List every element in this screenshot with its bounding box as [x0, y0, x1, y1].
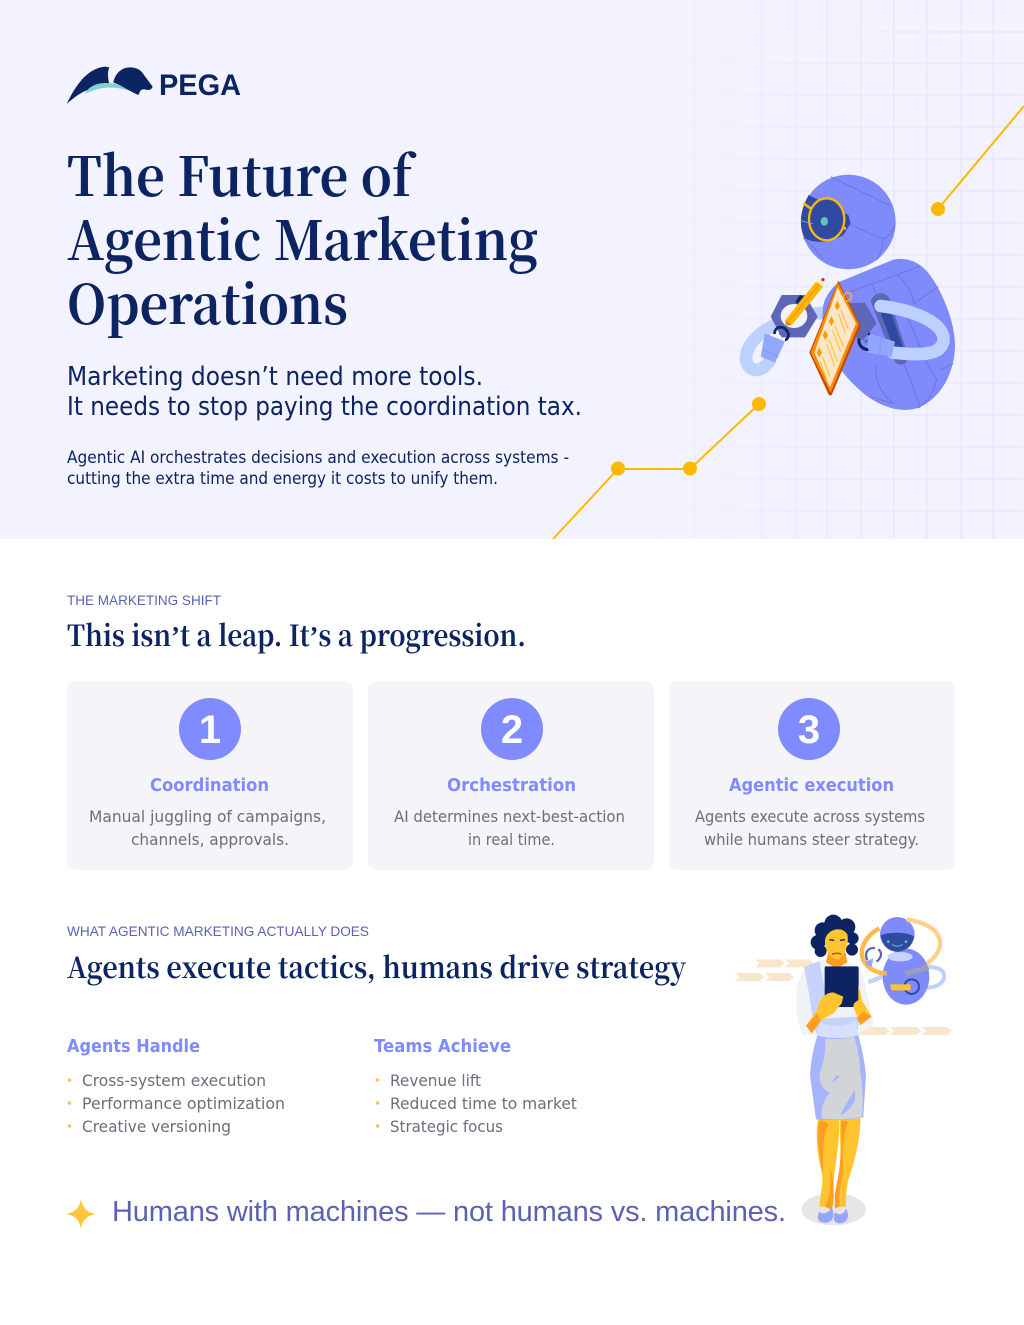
panel: step 1: Coordination [150, 775, 269, 796]
small robot body [883, 949, 929, 1005]
pencil [785, 278, 825, 326]
list: agents handle: Creative versioning [82, 1117, 231, 1136]
robot left gripper [761, 333, 785, 363]
panel: step 2 [368, 681, 654, 870]
list: agents handle: Performance optimization [82, 1094, 285, 1113]
clipboard [809, 281, 861, 395]
heading: what agentic marketing does: WHAT AGENTIC MARKETING ACTUALLY DOES [67, 923, 369, 939]
robot head [801, 175, 896, 269]
logo: Pega [67, 67, 241, 104]
panel: step 2: in real time. [468, 830, 555, 849]
subtitle: It needs to stop paying the coordination tax. [67, 392, 582, 422]
arms and hands [853, 985, 872, 1025]
list: teams achieve: Teams Achieve [374, 1036, 511, 1057]
list: agents handle [67, 1036, 285, 1136]
subtitle [67, 362, 582, 422]
panel: step 2: AI determines next-best-action [394, 807, 625, 826]
icon: sparkle [66, 1199, 96, 1229]
panel: step 3 [669, 681, 955, 870]
panel: step 1 [67, 681, 353, 870]
intro text: Agentic AI orchestrates decisions and execution across systems - [67, 448, 569, 468]
intro text [67, 448, 569, 489]
intro text: cutting the extra time and energy it costs to unify them. [67, 469, 498, 489]
heading: what agentic marketing does: Agents execute tactics, humans drive strategy [67, 946, 686, 987]
panel: step 2: Orchestration [447, 775, 576, 796]
robot shoulder socket [871, 293, 908, 365]
orbit ring [862, 928, 887, 973]
skirt top [810, 1035, 866, 1076]
panel: step 3: while humans steer strategy. [704, 830, 919, 849]
line chart: growth line [553, 106, 1024, 539]
hex nut [771, 295, 818, 337]
title: Agentic Marketing [67, 199, 538, 276]
heading: what agentic marketing does [67, 923, 686, 987]
subtitle: Marketing doesn’t need more tools. [67, 362, 483, 392]
blouse [797, 960, 874, 1038]
small robot claw [866, 948, 881, 962]
panel: step 3: Agents execute across systems [695, 807, 925, 826]
list: teams achieve [374, 1036, 577, 1136]
list: agents handle: Agents Handle [67, 1036, 200, 1057]
heading: marketing shift [67, 592, 526, 655]
logo: Pega: PEGA [159, 69, 241, 102]
panel: step 3: 3 [798, 708, 820, 752]
title: The Future of [67, 135, 417, 212]
neck and face [826, 950, 847, 968]
robot body [822, 259, 955, 410]
title: Operations [67, 263, 348, 340]
title [67, 135, 538, 340]
list: teams achieve: Strategic focus [390, 1117, 503, 1136]
callout: Humans with machines — not humans vs. machines. [112, 1196, 786, 1228]
tablet [825, 966, 859, 1007]
robot left arm [746, 313, 823, 370]
small robot head [880, 917, 915, 952]
panel: step 3: Agentic execution [729, 775, 894, 796]
list: teams achieve: Revenue lift [390, 1071, 481, 1090]
hex nut behind clipboard [843, 303, 877, 340]
heading: marketing shift: THE MARKETING SHIFT [67, 592, 221, 608]
robot right arm [881, 306, 944, 354]
robot eye [801, 195, 851, 242]
speed arrows [735, 959, 952, 1035]
hair [811, 915, 859, 957]
legs, skirt and shoes [801, 1060, 866, 1225]
panel: step 2: 2 [501, 708, 523, 752]
list: teams achieve: Reduced time to market [390, 1094, 577, 1113]
panel: step 1: 1 [199, 708, 221, 752]
list: agents handle: Cross-system execution [82, 1071, 266, 1090]
panel: step 1: Manual juggling of campaigns, [89, 807, 326, 826]
heading: marketing shift: This isn’t a leap. It’s a progression. [67, 614, 526, 655]
illustration: woman with tablet and robot [735, 915, 952, 1225]
illustration: robot with clipboard [746, 175, 955, 410]
panel: step 1: channels, approvals. [131, 830, 289, 849]
small robot arm [910, 966, 944, 988]
